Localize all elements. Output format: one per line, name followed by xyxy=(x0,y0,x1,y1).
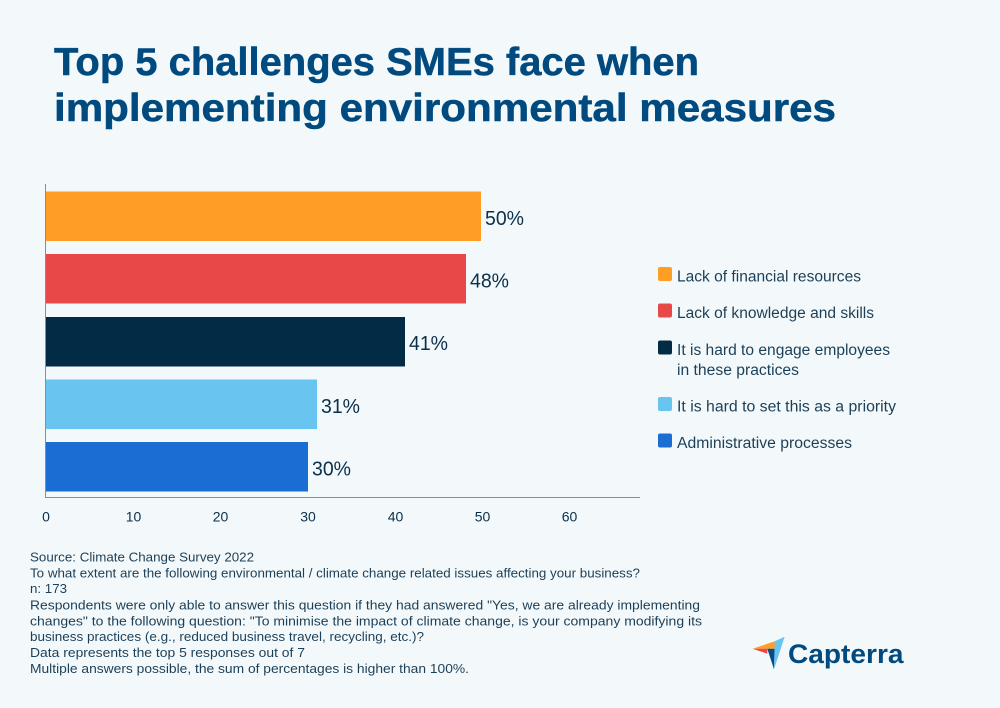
footnote: business practices (e.g., reduced business travel, recycling, etc.)? xyxy=(30,629,424,644)
footnote: n: 173 xyxy=(30,581,67,596)
legend item: engage xyxy=(658,340,890,379)
axis labels: 20 xyxy=(213,508,228,524)
footnote xyxy=(30,550,702,676)
legend item: engage: It is hard to engage employees xyxy=(677,342,890,359)
axis labels: 0 xyxy=(42,508,50,524)
footnote: To what extent are the following environmental / climate change related issues affecting your business? xyxy=(30,566,640,580)
legend xyxy=(658,267,896,452)
bar: lack of knowledge and skills 48%: 48% xyxy=(470,270,509,292)
axis labels: 40 xyxy=(388,508,403,524)
bar: lack of financial resources 50% xyxy=(46,192,524,241)
logo: Capterra: Capterra xyxy=(788,639,905,669)
legend item: priority: It is hard to set this as a priority xyxy=(677,398,896,416)
legend item: administrative: Administrative processes xyxy=(677,435,852,452)
bar chart xyxy=(42,184,640,524)
bar: administrative processes 30%: 30% xyxy=(312,458,351,480)
bar: lack of knowledge and skills 48% xyxy=(46,254,509,304)
footnote: changes" to the following question: "To minimise the impact of climate change, is your company modifying its xyxy=(30,614,702,628)
axis labels: 50 xyxy=(475,508,490,524)
footnote: Data represents the top 5 responses out of 7 xyxy=(30,645,305,660)
footnote: Multiple answers possible, the sum of percentages is higher than 100%. xyxy=(30,661,469,676)
legend item: knowledge: Lack of knowledge and skills xyxy=(677,305,874,322)
bar: administrative processes 30% xyxy=(46,442,351,492)
axis labels: 30 xyxy=(300,508,316,524)
title: Top 5 challenges SMEs face when xyxy=(54,41,699,84)
title: implementing environmental measures xyxy=(54,87,836,130)
bar: hard to engage employees 41% xyxy=(46,317,448,366)
footnote: Source: Climate Change Survey 2022 xyxy=(30,550,254,564)
axis labels: 60 xyxy=(562,508,577,524)
logo: Capterra xyxy=(753,637,905,669)
footnote: Respondents were only able to answer this question if they had answered "Yes, we are already implementing xyxy=(30,598,700,612)
legend item: engage: in these practices xyxy=(677,362,799,379)
axis labels: 10 xyxy=(126,508,141,524)
axis labels xyxy=(42,508,577,524)
bar: hard to set as priority 31%: 31% xyxy=(321,396,360,418)
icon: Capterra arrow xyxy=(753,637,785,669)
bar: lack of financial resources 50%: 50% xyxy=(485,208,524,230)
title xyxy=(54,41,836,130)
bar: hard to set as priority 31% xyxy=(46,380,360,429)
legend item: financial: Lack of financial resources xyxy=(677,268,861,286)
bar: hard to engage employees 41%: 41% xyxy=(409,333,448,355)
